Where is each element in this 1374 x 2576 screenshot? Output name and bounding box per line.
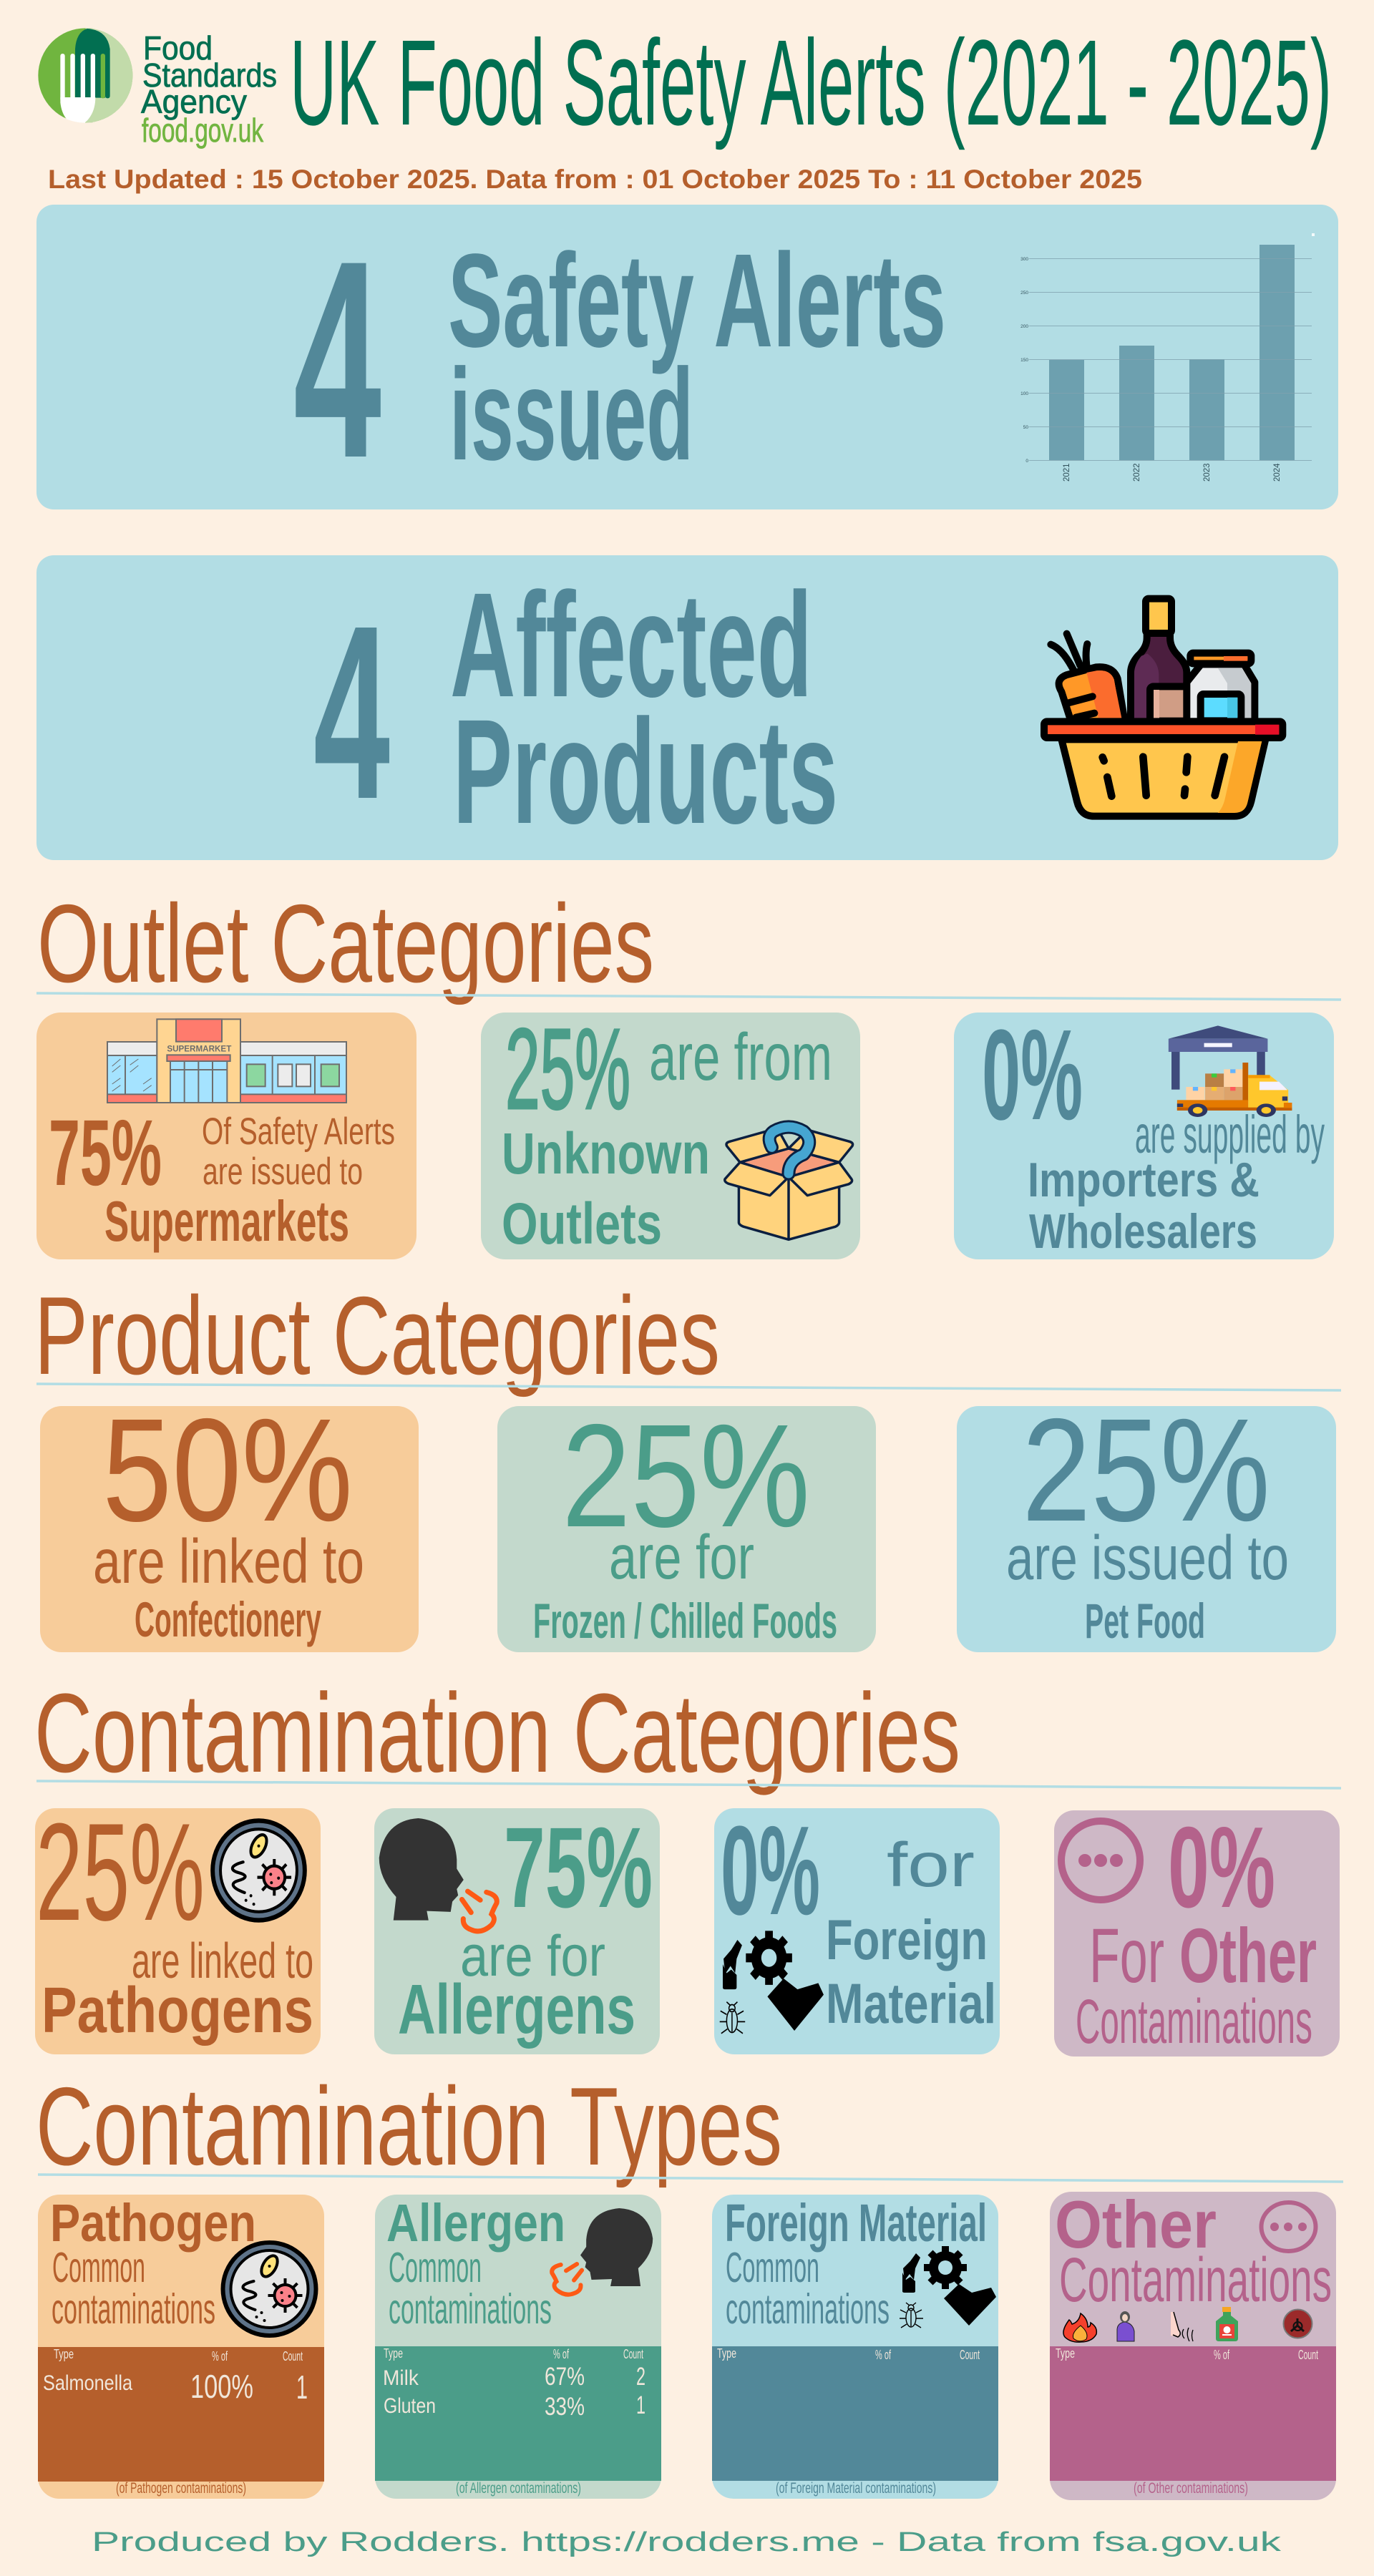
panel: affected products bbox=[36, 555, 1338, 860]
subheading: common contaminations: Common bbox=[52, 2244, 145, 2291]
table: allergen contaminations: Gluten bbox=[384, 2394, 436, 2418]
logo wordmark: food.gov.uk bbox=[142, 112, 264, 149]
table: pathogen contaminations: Count bbox=[283, 2349, 303, 2363]
icon: glass, gear, metal and insect bbox=[900, 2246, 996, 2328]
icon: supermarket building: SUPERMARKET bbox=[167, 1043, 232, 1053]
table: allergen contaminations: Milk bbox=[383, 2366, 419, 2390]
footnote: (of Other contaminations) bbox=[1134, 2480, 1248, 2497]
table: other contaminations bbox=[1050, 2346, 1336, 2481]
icon: open box with question mark bbox=[725, 1127, 853, 1239]
card background bbox=[38, 2195, 324, 2499]
icon: petri dish bbox=[220, 2240, 318, 2338]
stat: 25%: 25% bbox=[505, 1005, 630, 1133]
subheading: common contaminations: Common bbox=[389, 2244, 482, 2291]
table: allergen contaminations: 1 bbox=[636, 2391, 645, 2419]
icon: supermarket building bbox=[107, 1019, 346, 1103]
stat: 0%: 0% bbox=[1168, 1803, 1275, 1932]
icon: fork in circle bbox=[38, 28, 132, 123]
subheading: common contaminations: contaminations bbox=[726, 2285, 890, 2333]
footnote: (of Allergen contaminations) bbox=[456, 2480, 581, 2497]
text: are supplied by importers and wholesalers: Wholesalers bbox=[1029, 1204, 1257, 1259]
table: allergen contaminations: 67% bbox=[545, 2363, 585, 2391]
icon: nose and smell bbox=[1171, 2312, 1193, 2341]
card background bbox=[375, 2195, 661, 2499]
table: foreign material contaminations: % of bbox=[875, 2348, 892, 2362]
text: of safety alerts are issued to supermarkets: Supermarkets bbox=[104, 1189, 349, 1253]
panel: foreign material types bbox=[712, 2193, 998, 2499]
heading: pathogen: Pathogen bbox=[50, 2193, 256, 2253]
icon: glass, gear, metal and insect bbox=[720, 1931, 824, 2034]
subheading: common contaminations bbox=[389, 2244, 552, 2333]
card background bbox=[481, 1013, 860, 1259]
heading: allergen: Allergen bbox=[386, 2193, 565, 2253]
bar chart: alerts per year: 2024 bbox=[1273, 463, 1282, 482]
stat: 50%: 50% bbox=[102, 1388, 353, 1552]
icon: petri dish bbox=[210, 1818, 307, 1923]
bar chart: alerts per year: 250 bbox=[1020, 291, 1028, 296]
table: pathogen contaminations: % of bbox=[212, 2349, 228, 2363]
bar chart: alerts per year: 50 bbox=[1023, 425, 1028, 430]
logo wordmark: Food bbox=[143, 29, 213, 67]
table: foreign material contaminations bbox=[712, 2346, 998, 2481]
heading: outlet categories: Outlet Categories bbox=[37, 882, 654, 1005]
panel: safety alerts issued bbox=[36, 203, 1338, 517]
panel: other contaminations bbox=[1054, 1803, 1340, 2057]
icon: unwell woman bbox=[1117, 2311, 1134, 2341]
panel: unknown outlets bbox=[481, 1005, 860, 1259]
icon: more dots circle bbox=[1061, 1821, 1140, 1900]
table: allergen contaminations: % of bbox=[553, 2347, 570, 2361]
heading: safety alerts issued: Safety Alerts bbox=[448, 227, 946, 375]
card background bbox=[1050, 2192, 1336, 2500]
bar chart: alerts per year: 150 bbox=[1020, 358, 1028, 363]
stat: 25%: 25% bbox=[1022, 1388, 1270, 1552]
table: foreign material contaminations: Type bbox=[717, 2346, 736, 2361]
big number 4: 4 bbox=[313, 575, 391, 851]
bar chart: alerts per year: 300 bbox=[1020, 257, 1028, 262]
text: allergens: Allergens bbox=[398, 1970, 635, 2049]
text: are from unknown outlets bbox=[502, 1020, 832, 1257]
table: pathogen contaminations: 100% bbox=[190, 2368, 253, 2405]
text: are linked to: are linked to bbox=[132, 1933, 313, 1989]
text: of safety alerts are issued to supermarkets bbox=[104, 1111, 395, 1253]
table: allergen contaminations: 2 bbox=[636, 2363, 645, 2391]
table: pathogen contaminations: 1 bbox=[296, 2368, 308, 2406]
subheading: common contaminations: Common bbox=[726, 2244, 819, 2291]
subheading: common contaminations: contaminations bbox=[389, 2285, 552, 2333]
subheading: common contaminations bbox=[52, 2244, 215, 2333]
heading: contamination types: Contamination Types bbox=[36, 2064, 782, 2188]
icon: coughing head bbox=[552, 2208, 653, 2295]
icon: fire bbox=[1063, 2313, 1096, 2342]
text: foreign material: Material bbox=[826, 1971, 996, 2035]
panel: supermarkets bbox=[36, 1013, 416, 1259]
bar chart: alerts per year: 2023 bbox=[1203, 463, 1212, 482]
bar chart: alerts per year: 0 bbox=[1025, 459, 1028, 464]
bar chart: alerts per year: 200 bbox=[1020, 324, 1028, 329]
card background bbox=[954, 1013, 1334, 1259]
heading: product categories: Product Categories bbox=[34, 1274, 720, 1397]
panel: pathogens bbox=[35, 1795, 321, 2054]
table: other contaminations: Type bbox=[1056, 2346, 1075, 2361]
icon: more dots circle bbox=[1261, 2202, 1315, 2251]
heading: affected products: Products bbox=[453, 689, 838, 855]
card background bbox=[497, 1406, 876, 1652]
logo: Food Standards Agency bbox=[38, 28, 277, 149]
panel background bbox=[36, 205, 1338, 509]
text: are from unknown outlets: Unknown bbox=[502, 1121, 710, 1186]
bar chart: alerts per year: 2021 bbox=[1063, 463, 1071, 482]
card background bbox=[712, 2195, 998, 2499]
text: are for: are for bbox=[460, 1924, 605, 1989]
card background bbox=[35, 1808, 321, 2054]
text: pathogens: Pathogens bbox=[42, 1975, 313, 2046]
panel: confectionery bbox=[40, 1388, 419, 1652]
text: are for: are for bbox=[609, 1523, 754, 1592]
table: other contaminations: % of bbox=[1214, 2348, 1230, 2362]
text: for: for bbox=[887, 1830, 975, 1900]
heading: affected products: Affected bbox=[450, 562, 812, 728]
bar chart: alerts per year: 100 bbox=[1020, 391, 1028, 396]
panel: other types bbox=[1050, 2187, 1336, 2500]
text: for other: For bbox=[1089, 1912, 1164, 1999]
card background bbox=[374, 1808, 660, 2054]
heading: foreign material: Foreign Material bbox=[725, 2193, 987, 2253]
table: pathogen contaminations: Salmonella bbox=[43, 2371, 132, 2395]
text: foreign material: Foreign bbox=[826, 1908, 988, 1971]
big number 4: 4 bbox=[293, 203, 382, 517]
icon: biohazard bbox=[1284, 2310, 1312, 2338]
icon: shopping basket bbox=[1044, 599, 1282, 816]
last updated line: Last Updated : 15 October 2025. Data from : 01 October 2025 To : 11 October 2025 bbox=[48, 165, 1142, 194]
text: of safety alerts are issued to supermarkets: Of Safety Alerts bbox=[202, 1111, 395, 1153]
table: allergen contaminations: Count bbox=[623, 2347, 643, 2361]
text: for other bbox=[1089, 1912, 1317, 1999]
panel: importers and wholesalers bbox=[954, 1003, 1334, 1259]
stat: 25%: 25% bbox=[562, 1394, 810, 1558]
stat: 0%: 0% bbox=[721, 1800, 820, 1941]
icon: loading dock and truck bbox=[1169, 1025, 1292, 1117]
panel background bbox=[36, 555, 1338, 860]
heading: contamination categories: Contamination Categories bbox=[34, 1671, 960, 1796]
text: are from unknown outlets: are from bbox=[649, 1020, 832, 1094]
logo wordmark bbox=[141, 29, 277, 149]
panel: allergens bbox=[374, 1803, 660, 2054]
panel: frozen and chilled foods bbox=[497, 1394, 876, 1652]
card background bbox=[714, 1808, 1000, 2054]
panel: foreign material bbox=[714, 1800, 1000, 2054]
logo wordmark: Agency bbox=[141, 83, 247, 120]
card background bbox=[1054, 1810, 1340, 2057]
footnote: (of Pathogen contaminations) bbox=[116, 2480, 246, 2497]
table: allergen contaminations: 33% bbox=[545, 2393, 585, 2421]
text: confectionery: Confectionery bbox=[135, 1592, 321, 1647]
stat: 0%: 0% bbox=[982, 1003, 1083, 1147]
heading: other: Other bbox=[1055, 2187, 1217, 2262]
subheading: common contaminations bbox=[726, 2244, 890, 2333]
table: allergen contaminations: Type bbox=[384, 2346, 403, 2361]
footnote: (of Foreign Material contaminations) bbox=[776, 2480, 936, 2497]
text: are from unknown outlets: Outlets bbox=[502, 1191, 662, 1257]
table: pathogen contaminations bbox=[38, 2347, 324, 2482]
stat: 25%: 25% bbox=[36, 1795, 205, 1950]
table: allergen contaminations bbox=[375, 2346, 661, 2481]
heading: affected products bbox=[450, 562, 838, 855]
text: are issued to: are issued to bbox=[1006, 1523, 1289, 1593]
bar chart: alerts per year bbox=[1020, 233, 1315, 482]
stat: 75%: 75% bbox=[49, 1100, 162, 1205]
text: are supplied by importers and wholesalers: Importers & bbox=[1028, 1153, 1260, 1207]
panel: allergen types bbox=[375, 2193, 661, 2499]
text: foreign material bbox=[826, 1908, 996, 2035]
card background bbox=[957, 1406, 1336, 1652]
card background bbox=[40, 1406, 419, 1652]
table: foreign material contaminations: Count bbox=[960, 2348, 980, 2362]
text: pet food: Pet Food bbox=[1085, 1594, 1205, 1649]
icon: poison bottle bbox=[1216, 2307, 1238, 2341]
panel: pathogen types bbox=[38, 2193, 324, 2499]
text: frozen and chilled foods: Frozen / Chilled Foods bbox=[533, 1594, 837, 1649]
heading: safety alerts issued: issued bbox=[449, 341, 693, 487]
logo wordmark: Standards bbox=[142, 57, 277, 94]
stat: 75%: 75% bbox=[504, 1803, 653, 1931]
text: of safety alerts are issued to supermarkets: are issued to bbox=[203, 1151, 363, 1193]
text: are linked to: are linked to bbox=[93, 1527, 364, 1596]
subheading: common contaminations: contaminations bbox=[52, 2285, 215, 2333]
table: other contaminations: Count bbox=[1298, 2348, 1318, 2362]
footer credit: Produced by Rodders. https://rodders.me - Data from fsa.gov.uk bbox=[92, 2527, 1282, 2557]
table: pathogen contaminations: Type bbox=[54, 2347, 74, 2361]
heading: safety alerts issued bbox=[448, 227, 946, 487]
bar chart: alerts per year: 2022 bbox=[1133, 463, 1141, 482]
panel: pet food bbox=[957, 1388, 1336, 1652]
text: are supplied by importers and wholesalers bbox=[1028, 1105, 1325, 1259]
card background bbox=[36, 1013, 416, 1259]
icon: coughing head bbox=[379, 1818, 497, 1931]
